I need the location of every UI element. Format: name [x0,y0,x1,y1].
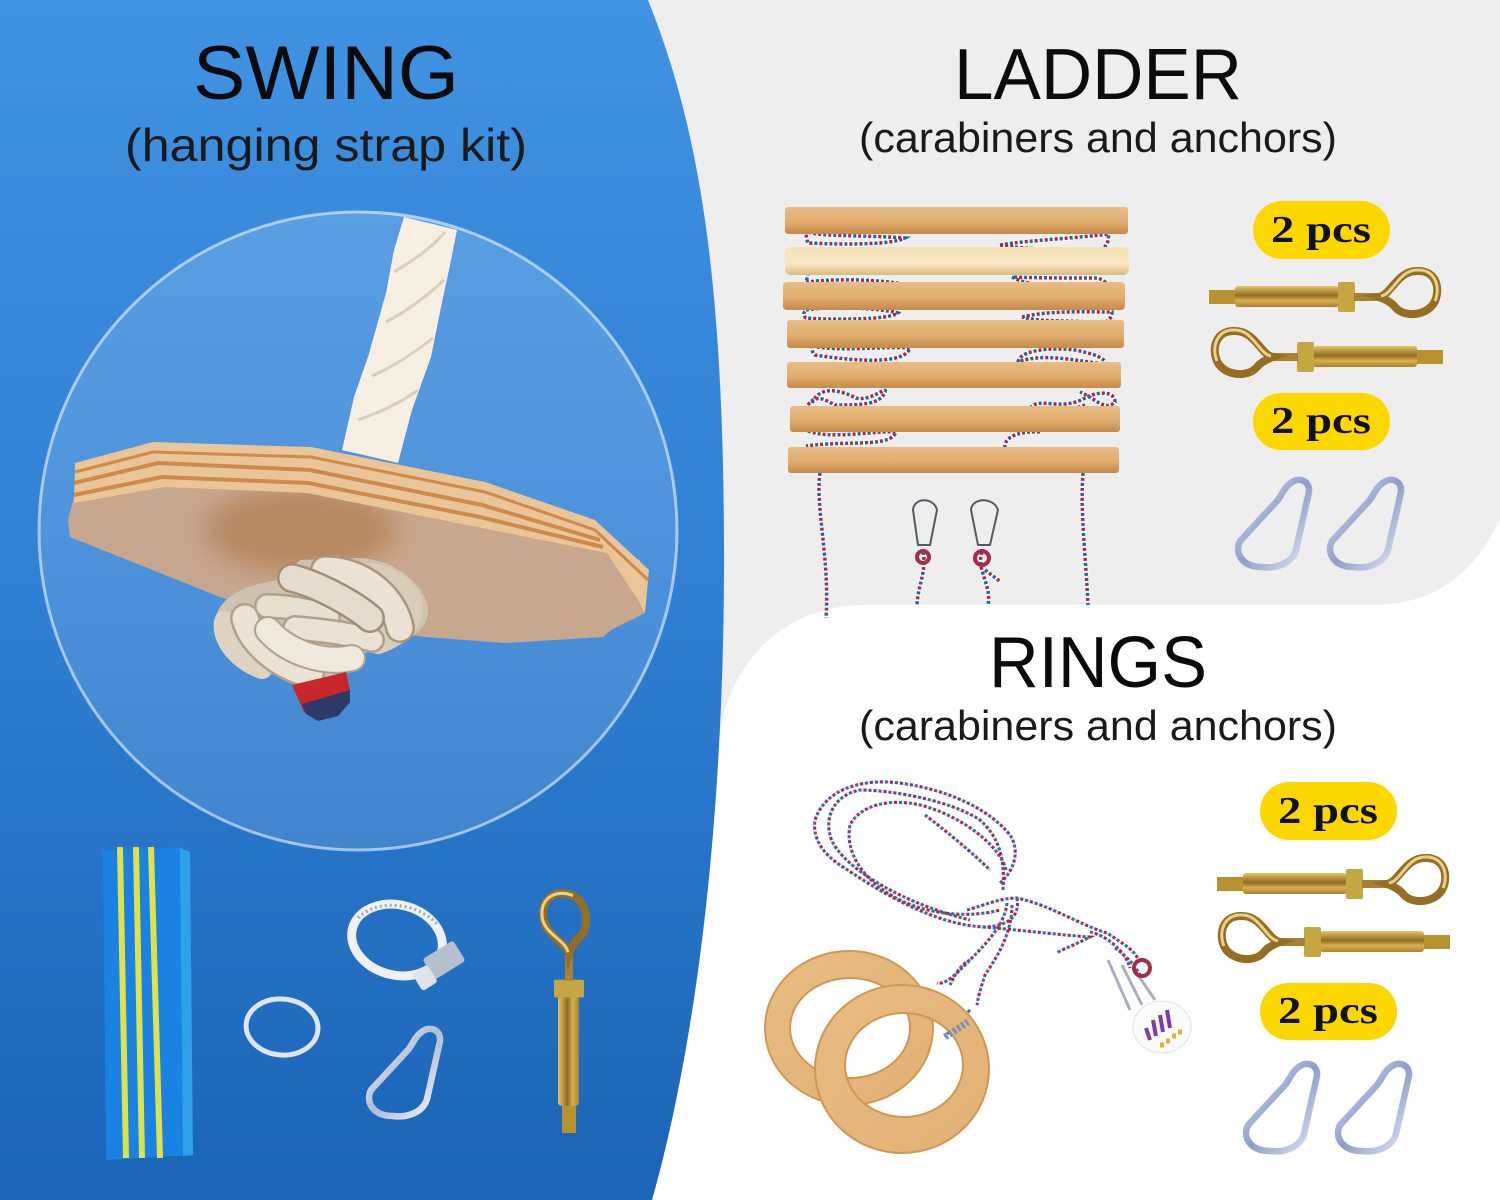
icon: carabiner [369,1029,440,1116]
rope [342,217,457,463]
icon: ladder carabiners [1238,480,1401,567]
icon: ladder anchor top [1209,270,1437,314]
tag with carabiners [1108,960,1191,1053]
heading: rings: (carabiners and anchors) [859,702,1337,749]
icon: ladder anchor bottom [1215,330,1443,374]
icon: vertical eye bolt [542,893,586,1133]
badge: ladder carabiners 2 pcs [1253,393,1390,450]
heading: swing: (hanging strap kit) [125,119,527,171]
rope end cap [292,672,350,721]
shadow of knot on seat [205,488,395,572]
heading: rings [859,623,1337,749]
badge: ladder carabiners 2 pcs: 2 pcs [1271,400,1371,442]
heading: ladder: LADDER [954,35,1242,115]
badge: rings carabiners 2 pcs: 2 pcs [1278,990,1378,1032]
panel: rings white background [650,520,1500,1200]
left ring [765,951,933,1105]
seat edge [74,442,649,613]
cord wrap on ring [945,1022,968,1037]
badge: ladder anchors 2 pcs: 2 pcs [1271,209,1371,251]
panel: swing blue background [0,0,724,1200]
heading: swing: SWING [193,31,459,116]
circle highlight [39,212,677,850]
rope knot [214,558,428,682]
ladder small carabiners [913,500,998,565]
badge: rings anchors 2 pcs [1260,782,1397,840]
icon: rings anchor top [1217,857,1445,901]
ladder rungs [783,207,1129,473]
ladder cords [804,228,1115,618]
icon: rings carabiners [1246,1064,1409,1151]
icon: hanging strap [103,847,193,1160]
wooden seat underside [68,470,645,643]
icon: hose clamp [344,894,466,991]
icon: metal ring [244,996,320,1058]
plywood plies [74,452,648,580]
heading: ladder: (carabiners and anchors) [859,114,1337,161]
right ring [815,985,989,1153]
ladder [783,207,1129,618]
gymnastic rings [765,782,1191,1153]
badge: rings carabiners 2 pcs [1260,983,1397,1040]
badge: rings anchors 2 pcs: 2 pcs [1278,790,1378,832]
heading: rings: RINGS [989,623,1207,703]
icon: rings anchor bottom [1222,915,1450,959]
swing seat with rope [68,217,649,721]
ring cords [815,782,1140,1037]
badge: ladder anchors 2 pcs [1253,201,1390,259]
heading: swing [125,31,527,171]
heading: ladder [859,35,1337,161]
